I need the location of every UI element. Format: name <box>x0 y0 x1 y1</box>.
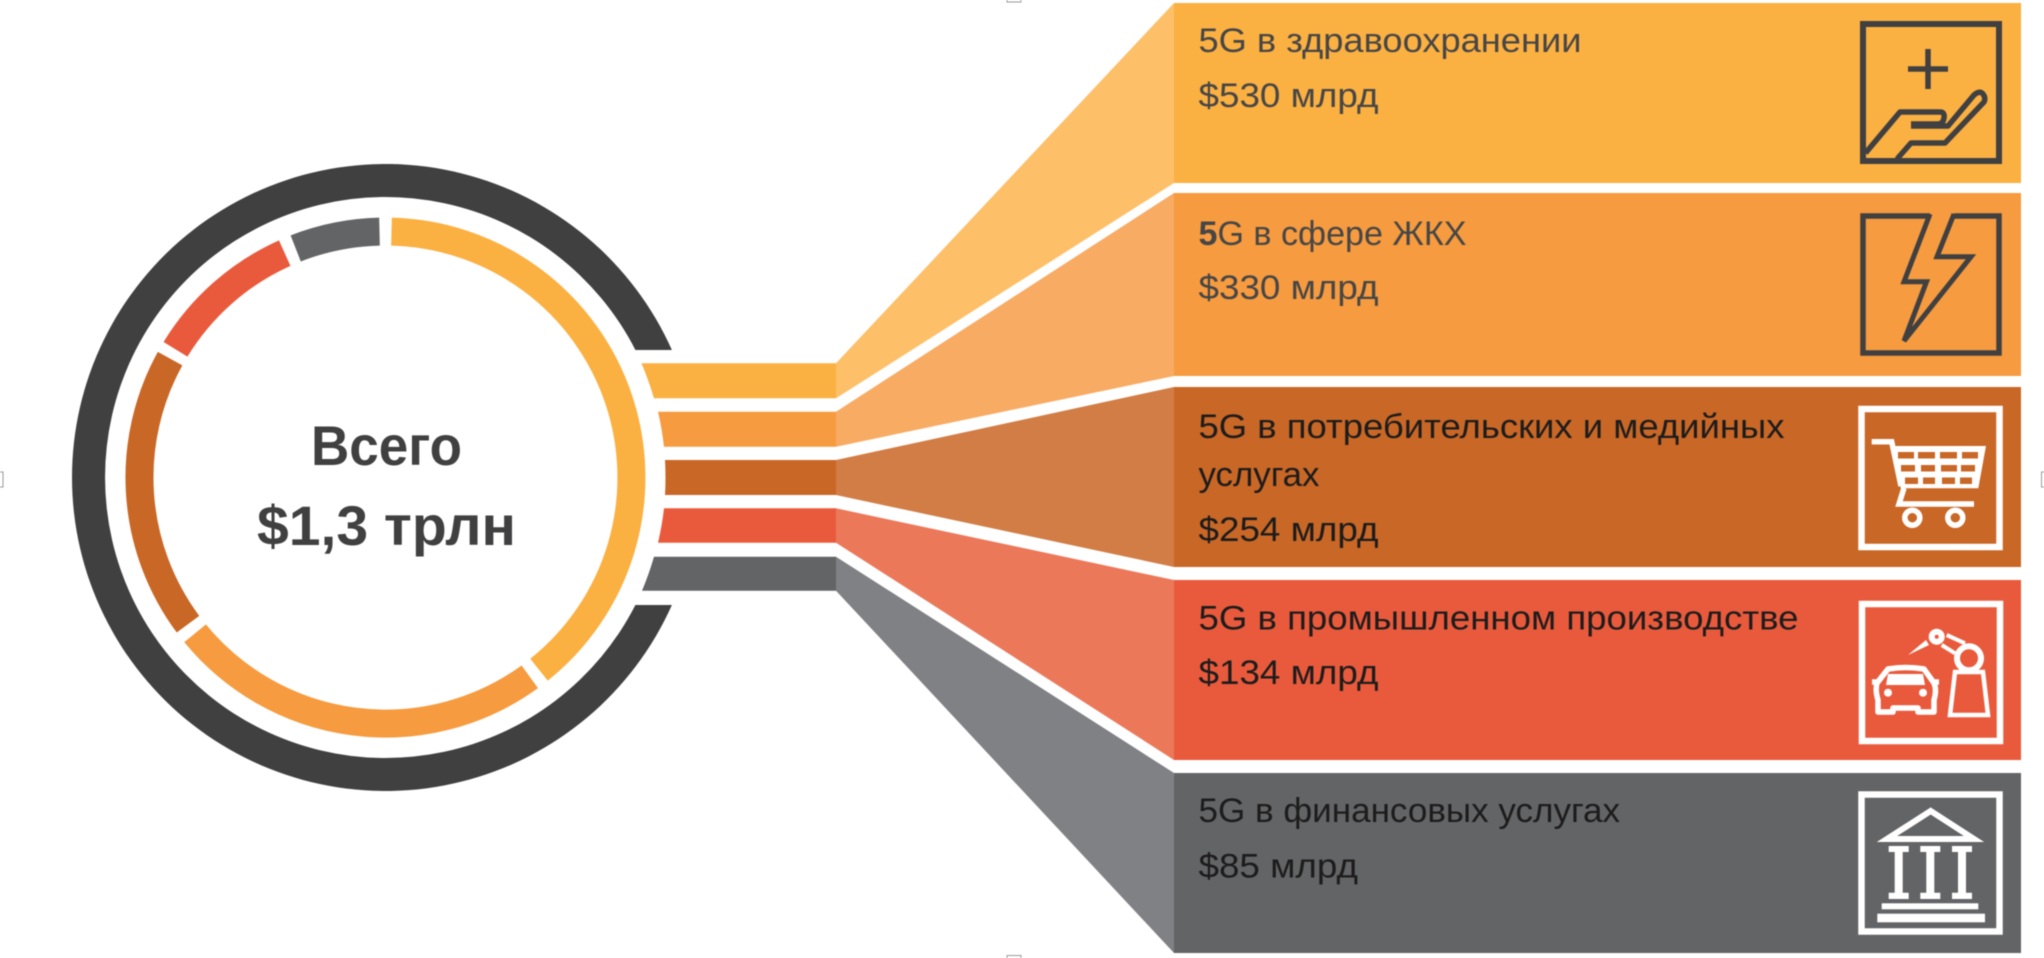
text: consumer and media: 5G в потребительских и медийных <box>1198 408 1784 446</box>
panel background: consumer and media <box>1174 387 2021 567</box>
panel: financial services <box>836 557 2021 953</box>
panel background: manufacturing <box>1174 580 2021 760</box>
center total label: $1,3 трлн <box>257 494 516 557</box>
text: healthcare <box>1198 22 1582 115</box>
icon: lightning bolt <box>1863 214 1999 353</box>
panel: consumer and media <box>836 387 2021 567</box>
text: financial services: $85 млрд <box>1198 848 1358 886</box>
icon: robot arm and car <box>1862 604 2000 741</box>
panel background: financial services <box>1174 773 2021 953</box>
text: utilities: 5G в сфере ЖКХ <box>1198 215 1466 253</box>
text: manufacturing <box>1198 600 1798 692</box>
icon: hand with plus <box>1863 24 1999 161</box>
center total label <box>257 414 516 557</box>
icon: shopping cart <box>1862 409 2000 547</box>
fan: financial services <box>836 557 1174 953</box>
fan: healthcare <box>836 3 1174 398</box>
text: manufacturing: $134 млрд <box>1198 654 1379 692</box>
text: financial services: 5G в финансовых услугах <box>1198 792 1620 830</box>
fan: consumer and media <box>836 387 1174 567</box>
text: consumer and media: $254 млрд <box>1198 511 1379 549</box>
center total label: Всего <box>311 414 462 477</box>
panel: manufacturing <box>836 508 2021 760</box>
text: financial services <box>1198 792 1620 886</box>
panel: healthcare <box>836 3 2021 398</box>
donut chart: total <box>72 164 672 791</box>
icon: bank building <box>1862 794 2000 932</box>
text: healthcare: $530 млрд <box>1198 77 1379 115</box>
text: utilities: $330 млрд <box>1198 269 1379 307</box>
panel: utilities <box>836 193 2021 447</box>
text: utilities <box>1198 215 1466 307</box>
connector bars <box>642 363 836 591</box>
fan: manufacturing <box>836 508 1174 760</box>
text: consumer and media <box>1198 408 1784 549</box>
panel background: utilities <box>1174 193 2021 376</box>
inner ring segments <box>139 232 631 724</box>
text: consumer and media: услугах <box>1198 456 1320 494</box>
text: healthcare: 5G в здравоохранении <box>1198 22 1582 60</box>
text: manufacturing: 5G в промышленном производстве <box>1198 600 1798 638</box>
outer dark ring <box>72 164 672 791</box>
fan: utilities <box>836 193 1174 447</box>
panel background: healthcare <box>1174 3 2021 183</box>
